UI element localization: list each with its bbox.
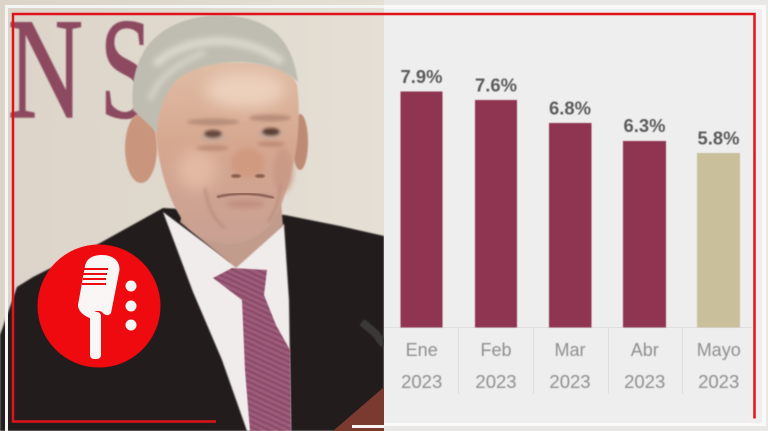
portrait: eyes [187,114,291,151]
bar: Feb 7.6%: 2023 [475,371,517,392]
axis grid [384,327,752,394]
bar: Mayo 5.8%: 5.8% [698,128,739,148]
portrait: nose and mouth [231,148,265,178]
bar: Ene 7.9%: Ene [406,340,438,360]
bar: Mayo 5.8%: Mayo [697,340,741,360]
bar: Mayo 5.8% [697,128,741,392]
bar: Mar 6.8%: Mar [554,340,586,360]
bar: Ene 7.9%: 7.9% [401,66,442,87]
bar: Mar 6.8%: 2023 [549,371,591,392]
bar: Ene 7.9%: 2023 [401,371,442,392]
icon: microphone grille [82,269,108,284]
bar: Mar 6.8%: 6.8% [549,98,591,118]
portrait: shirt [163,212,291,431]
icon: microphone [78,255,120,359]
portrait: hair [132,15,298,133]
bar: Abr 6.3%: Abr [631,340,659,360]
bar: Feb 7.6% [475,74,517,392]
bar: Feb 7.6%: 7.6% [475,74,517,96]
portrait: suit jacket [0,208,384,431]
panel: bar chart [384,0,768,431]
portrait: tie [213,268,291,431]
portrait: face [155,62,299,244]
panel: press conference photo [0,0,384,431]
bar: Mayo 5.8%: 2023 [698,371,739,392]
bar: Abr 6.3% [623,115,666,392]
bar: Abr 6.3%: 6.3% [624,115,665,136]
bar: Mar 6.8% [549,98,592,392]
icon: three dots [126,280,136,330]
lectern corner [333,387,384,431]
portrait: ears [125,113,157,183]
portrait: face highlights [205,72,285,108]
icon: red microphone badge [38,244,160,368]
white frame [6,6,384,431]
bar: Abr 6.3%: 2023 [624,371,665,392]
portrait: neck [180,190,283,268]
portrait: lapel microphone [362,322,384,345]
bar: Feb 7.6%: Feb [480,340,512,360]
bar: Ene 7.9% [400,66,442,392]
